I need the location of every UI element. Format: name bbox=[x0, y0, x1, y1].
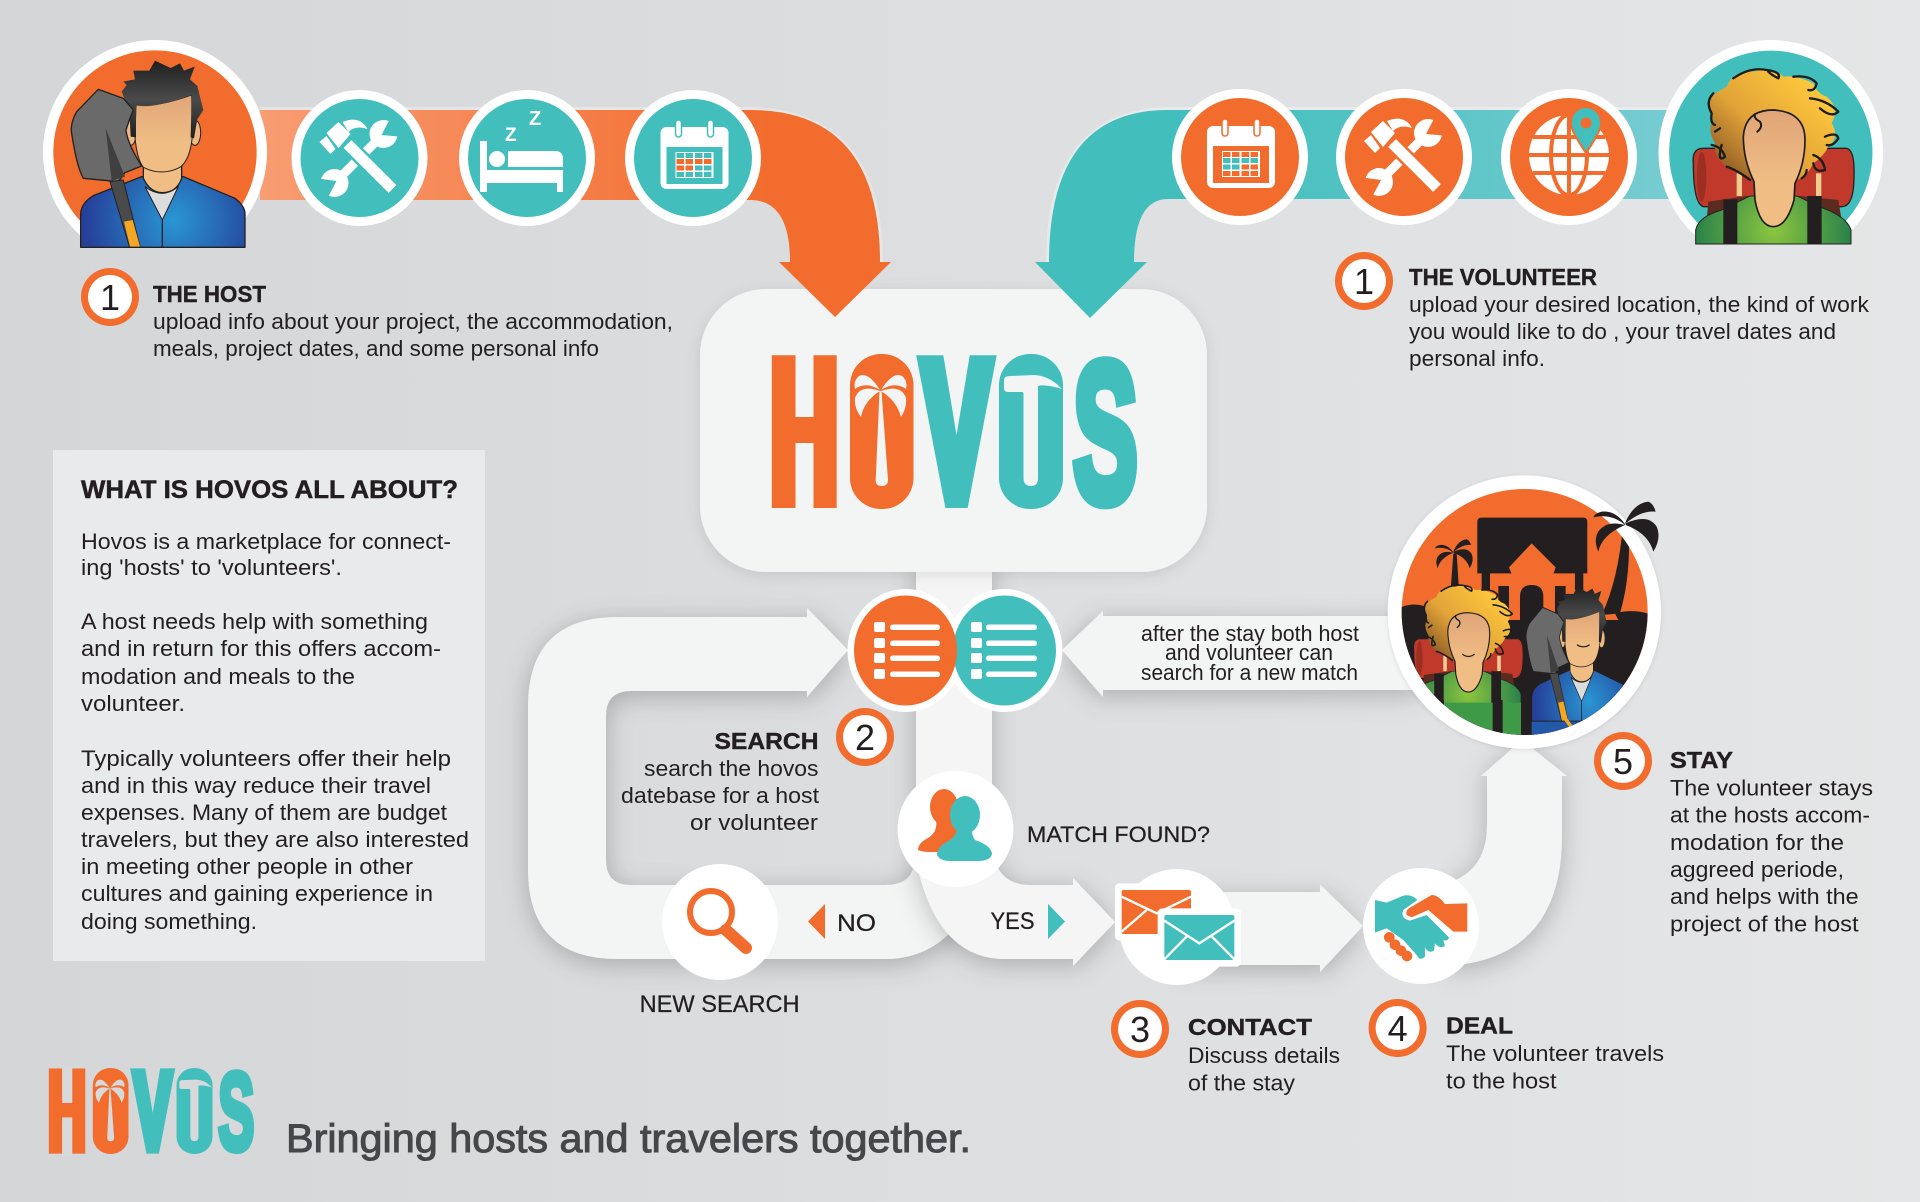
hovos logo bbox=[771, 321, 1138, 544]
badge 1 volunteer bbox=[1335, 252, 1393, 310]
step 1 volunteer: text block: you would like to do , your travel dates and bbox=[1409, 319, 1836, 344]
step 2 search: text block: SEARCH bbox=[714, 728, 818, 754]
step 4 deal: text block: DEAL bbox=[1446, 1012, 1513, 1038]
yes label: YES bbox=[990, 908, 1034, 935]
icon: tools teal bbox=[292, 90, 428, 226]
portrait: volunteer bbox=[1658, 40, 1883, 265]
badge 1: 1 bbox=[100, 277, 120, 318]
footer logo: H bbox=[48, 1052, 86, 1170]
flow: stem and yes arrow bbox=[916, 560, 1115, 966]
step 5 stay: text block: modation for the bbox=[1670, 830, 1844, 855]
stay illustration bbox=[1388, 475, 1661, 749]
footer logo bbox=[48, 1049, 254, 1174]
hovos logo: O bbox=[850, 321, 913, 542]
icon: bed: Z bbox=[505, 125, 517, 146]
portrait: host bbox=[43, 40, 267, 264]
paragraph: marketplace: Hovos is a marketplace for connect- bbox=[81, 529, 451, 554]
paragraph: host needs: modation and meals to the bbox=[81, 664, 355, 689]
icon: tools orange bbox=[1336, 89, 1472, 225]
icon: globe with pin bbox=[1501, 89, 1637, 225]
icon: calendar teal bbox=[625, 90, 761, 226]
step 1 volunteer: text block: personal info. bbox=[1409, 346, 1545, 371]
step 1 volunteer: text block: upload your desired location, the kind of work bbox=[1409, 292, 1870, 317]
return arrow text: and volunteer can bbox=[1165, 640, 1333, 665]
step 5 stay: text block: and helps with the bbox=[1670, 884, 1859, 909]
step 3 contact: text block bbox=[1111, 1000, 1340, 1096]
step 3 contact: text block: CONTACT bbox=[1188, 1014, 1312, 1040]
step 5 stay: text block: project of the host bbox=[1670, 911, 1859, 936]
paragraph: marketplace: ing 'hosts' to 'volunteers'. bbox=[81, 555, 342, 580]
paragraph: host needs: volunteer. bbox=[81, 691, 185, 716]
flow: contact to deal arrow bbox=[1180, 884, 1363, 972]
footer logo: O bbox=[176, 1049, 212, 1172]
paragraph: volunteers: in meeting other people in other bbox=[81, 854, 413, 879]
footer logo: S bbox=[218, 1051, 254, 1174]
icon: palm in logo bbox=[854, 375, 906, 486]
badge 2 bbox=[836, 708, 894, 766]
step 4 deal: text block: The volunteer travels bbox=[1446, 1041, 1664, 1066]
yes arrow bbox=[1048, 904, 1065, 939]
no arrow bbox=[808, 904, 825, 939]
panel heading: WHAT IS HOVOS ALL ABOUT? bbox=[81, 476, 458, 504]
icon: match persons bbox=[898, 771, 1014, 887]
icon: handshake bbox=[1363, 868, 1479, 984]
footer logo: O bbox=[93, 1049, 128, 1172]
icon: search lists bbox=[848, 589, 1062, 712]
new search label: NEW SEARCH bbox=[640, 991, 800, 1018]
icon: big palm bbox=[1593, 502, 1659, 552]
hovos logo: V bbox=[924, 326, 989, 538]
icon: calendar orange bbox=[1172, 89, 1308, 225]
step 1 host: text block bbox=[81, 268, 673, 361]
paragraph: host needs: and in return for this offers accom- bbox=[81, 636, 441, 661]
step 3 contact: text block: of the stay bbox=[1188, 1071, 1295, 1096]
step 4 deal: text block: to the host bbox=[1446, 1069, 1557, 1094]
paragraph: volunteers: doing something. bbox=[81, 909, 257, 934]
step 5 stay: text block: aggreed periode, bbox=[1670, 857, 1844, 882]
paragraph: host needs bbox=[81, 609, 441, 716]
icon: bed bbox=[459, 90, 595, 226]
step 5 stay: text block: The volunteer stays bbox=[1670, 776, 1873, 800]
paragraph: marketplace bbox=[81, 529, 451, 580]
paragraph: volunteers bbox=[81, 746, 469, 934]
step 1 host: text block: upload info about your project, the accommodation, bbox=[153, 309, 673, 334]
hovos logo: O bbox=[999, 321, 1062, 542]
figure: host in stay bbox=[1526, 588, 1624, 735]
badge 4: 4 bbox=[1388, 1008, 1408, 1049]
paragraph: volunteers: travelers, but they are also interested bbox=[81, 827, 469, 852]
icon: new search magnifier bbox=[662, 864, 778, 980]
icon: contact envelopes bbox=[1115, 869, 1241, 985]
figure: volunteer in stay bbox=[1414, 585, 1523, 738]
hovos logo: H bbox=[771, 325, 838, 538]
return arrow text: search for a new match bbox=[1141, 660, 1358, 685]
paragraph: host needs: A host needs help with something bbox=[81, 609, 428, 634]
icon: hammer in logo bbox=[1004, 375, 1062, 486]
panel: what is hovos bbox=[53, 450, 485, 961]
step 3 contact: text block: Discuss details bbox=[1188, 1043, 1340, 1068]
central logo box bbox=[700, 289, 1207, 572]
step 2 search: text block: datebase for a host bbox=[621, 783, 819, 808]
step 2 search: text block: or volunteer bbox=[690, 810, 818, 835]
paragraph: volunteers: Typically volunteers offer their help bbox=[81, 746, 451, 771]
footer logo: V bbox=[134, 1052, 171, 1170]
paragraph: volunteers: cultures and gaining experience in bbox=[81, 881, 433, 906]
return arrow text: after the stay both host bbox=[1141, 621, 1359, 646]
step 4 deal: text block bbox=[1369, 999, 1664, 1094]
step 5 stay: text block: at the hosts accom- bbox=[1670, 802, 1870, 827]
step 2 search: text block bbox=[621, 708, 894, 835]
badge 2: 2 bbox=[855, 717, 875, 758]
orange arrow: host bbox=[260, 107, 891, 317]
step 1 host: text block: THE HOST bbox=[153, 281, 266, 307]
flow: return arrow bbox=[1062, 611, 1420, 697]
flow: search loop arrow bbox=[528, 608, 965, 959]
flow: deal to stay arrow bbox=[1440, 740, 1567, 966]
no label: NO bbox=[837, 910, 876, 937]
paragraph: volunteers: expenses. Many of them are budget bbox=[81, 800, 447, 825]
step 5 stay: text block: STAY bbox=[1670, 747, 1733, 773]
step 2 search: text block: search the hovos bbox=[644, 756, 818, 781]
badge 3 bbox=[1111, 1000, 1169, 1058]
icon: bed: Z bbox=[529, 108, 541, 130]
step 1 volunteer: text block: THE VOLUNTEER bbox=[1409, 264, 1597, 290]
teal arrow: volunteer bbox=[1035, 107, 1680, 318]
badge 5 bbox=[1594, 732, 1652, 790]
step 1 volunteer: text block bbox=[1335, 252, 1870, 371]
badge 4 bbox=[1369, 999, 1427, 1057]
step 1 host: text block: meals, project dates, and some personal info bbox=[153, 336, 599, 361]
tagline: Bringing hosts and travelers together. bbox=[286, 1117, 971, 1161]
match found label: MATCH FOUND? bbox=[1027, 822, 1210, 847]
paragraph: volunteers: and in this way reduce their travel bbox=[81, 773, 431, 798]
step 5 stay: text block bbox=[1594, 732, 1873, 936]
badge 1 bbox=[81, 268, 139, 326]
badge 3: 3 bbox=[1130, 1009, 1150, 1050]
return arrow text bbox=[1141, 621, 1359, 685]
hovos logo: S bbox=[1073, 323, 1138, 544]
badge 1 volunteer: 1 bbox=[1354, 261, 1374, 302]
badge 5: 5 bbox=[1613, 741, 1633, 782]
